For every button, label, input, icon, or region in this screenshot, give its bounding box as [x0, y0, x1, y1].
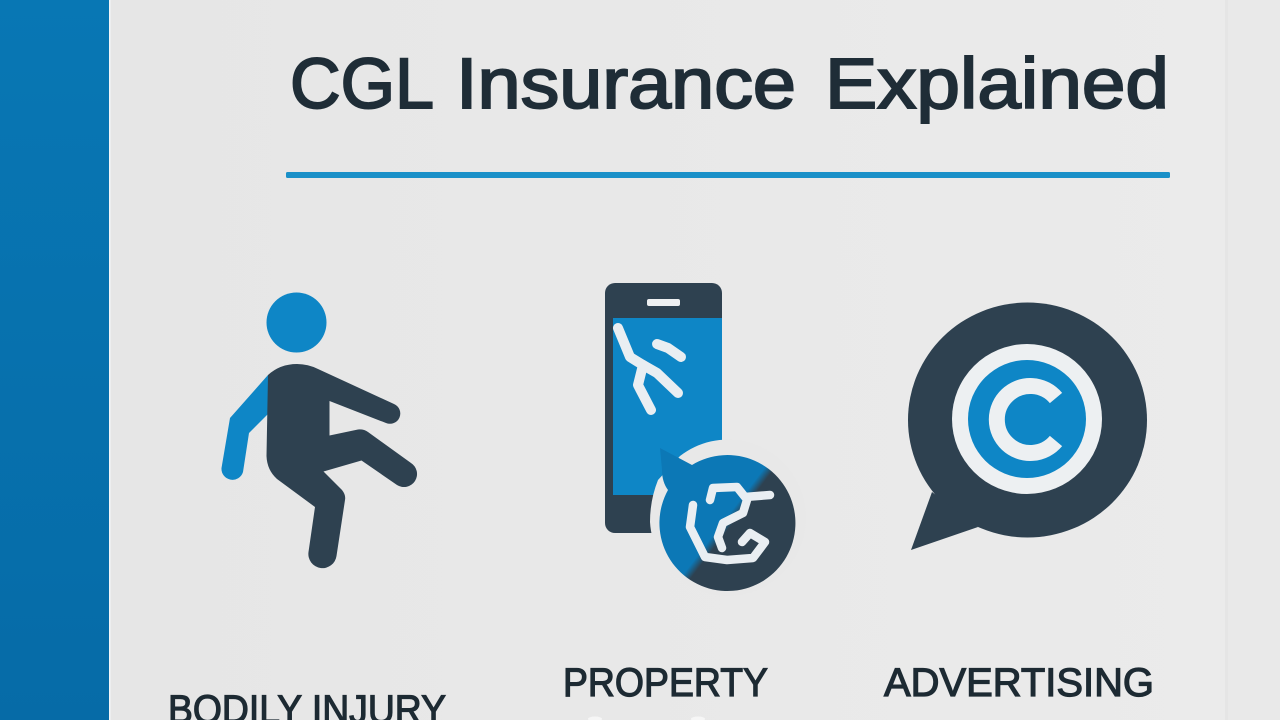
label: advertising: ADVERTISING — [884, 661, 1154, 705]
icon: copyright speech bubble (advertising) — [908, 302, 1147, 550]
title — [290, 45, 1169, 124]
label: property: PROPERTY — [563, 661, 768, 705]
phone screen — [613, 318, 722, 495]
damage badge — [659, 448, 795, 591]
panel: left blue band — [0, 0, 109, 720]
title: Insurance — [456, 45, 796, 124]
screen cracks — [618, 328, 681, 410]
icon: person slipping (bodily injury) — [221, 292, 417, 568]
phone speaker — [647, 299, 680, 306]
badge swirl — [690, 487, 770, 560]
bubble — [908, 302, 1147, 538]
badge halo — [650, 440, 806, 596]
title: Explained — [825, 45, 1169, 124]
phone body — [605, 283, 722, 533]
copyright C — [997, 386, 1056, 453]
title: CGL — [290, 45, 434, 124]
title underline — [286, 172, 1170, 178]
icon: cracked phone with damage badge (property) — [605, 283, 806, 596]
